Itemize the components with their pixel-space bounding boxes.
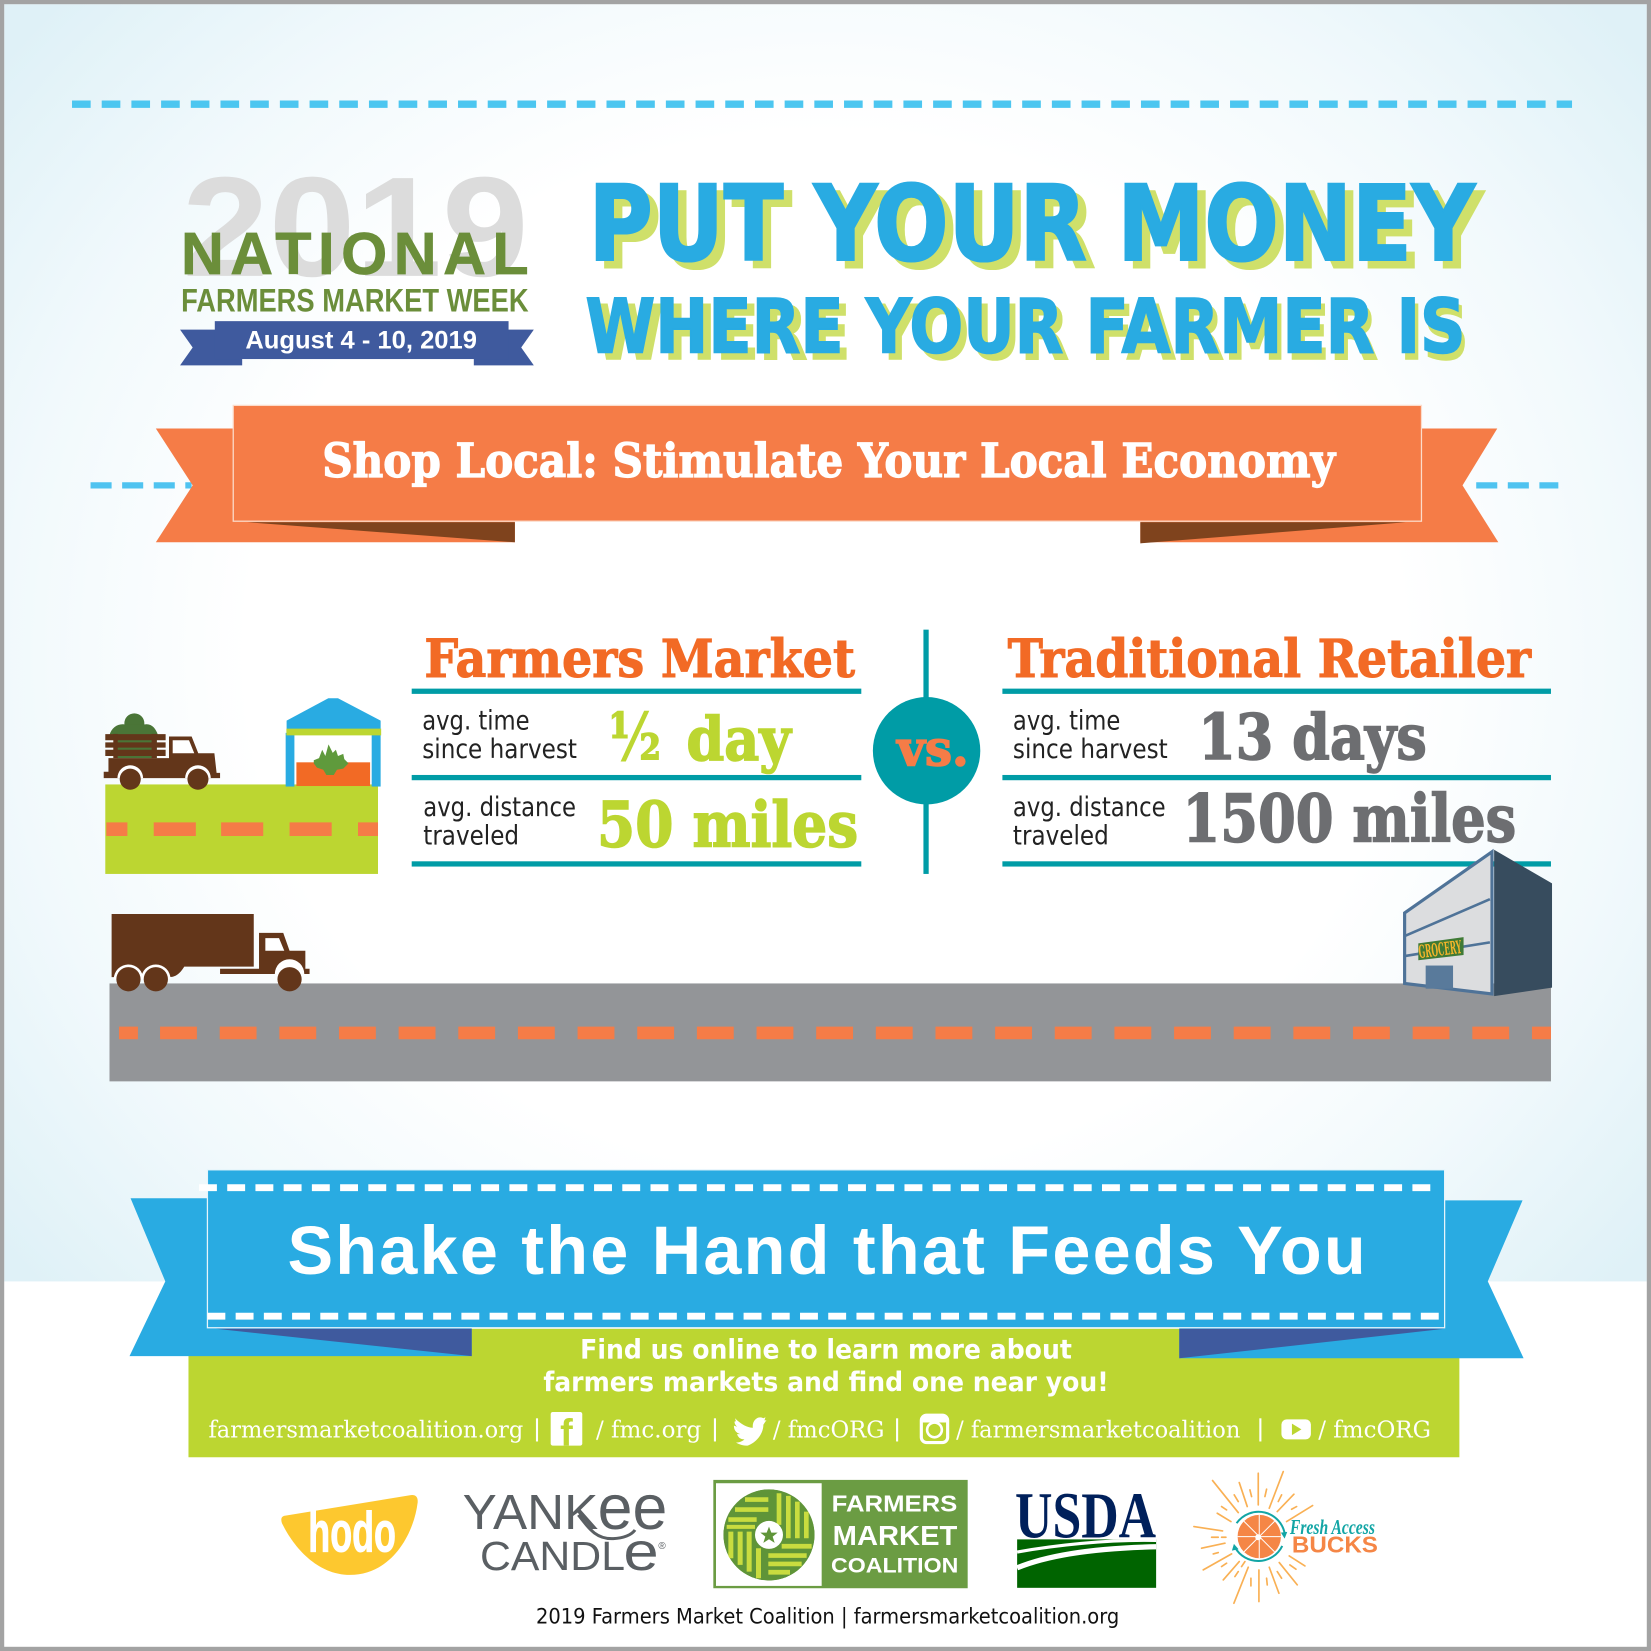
logo: yankee candle [463,1473,667,1582]
footer credit: 2019 Farmers Market Coalition | farmersmarketcoalition.org [536,1604,1119,1630]
icon: facebook [551,1412,582,1455]
logo: yankee candle: ® [658,1541,666,1552]
scene: farm truck and market stall on short road [104,698,381,874]
heading: Traditional Retailer [1008,629,1532,690]
versus badge [873,630,980,874]
message: Find us online to learn more about [580,1335,1072,1365]
facebook handle: / fmc.org [596,1417,701,1443]
icon: grocery store: GROCERY [1417,937,1463,963]
title: WHERE YOUR FARMER IS [594,290,1469,377]
title: WHERE YOUR FARMER IS [585,284,1466,371]
value: half day: ½ [609,700,661,776]
label: time: avg. time [1013,707,1120,737]
badge: 2019 National Farmers Market Week [180,148,534,365]
banner: shop local: Shop Local: Stimulate Your Local Economy [322,434,1337,488]
instagram handle: / farmersmarketcoalition [956,1417,1240,1443]
versus badge: vs. [896,721,969,777]
value: 1500 miles: 1500 miles [1182,781,1516,857]
year: 2019 [182,148,529,307]
label: time: since harvest [1013,735,1168,765]
icon: twitter [734,1417,767,1446]
label: time: since harvest [422,735,577,765]
heading: Farmers Market [424,629,856,690]
date ribbon: August 4 - 10, 2019 [245,327,477,355]
title: PUT YOUR MONEY [597,170,1485,292]
label: time: avg. time [422,707,530,737]
banner: shake the hand [130,1170,1524,1358]
logo: fresh access bucks: BUCKS [1292,1532,1378,1558]
long grey road [110,983,1551,1081]
logo: yankee candle: ee [598,1473,667,1543]
logo: farmers market coalition: FARMERS [832,1491,957,1517]
banner: shake the hand: Shake the Hand that Feeds You [287,1212,1366,1289]
value: 13 days: 13 days [1198,700,1427,774]
icon: market stall [286,698,381,787]
label: distance: avg. distance [423,793,576,823]
date ribbon [180,321,534,365]
icon: farm truck [104,713,220,790]
logo: yankee candle: e [623,1523,659,1582]
banner: shop local [156,405,1498,543]
message: farmers markets and find one near you! [543,1368,1109,1398]
value: 50 miles: 50 miles [597,788,858,862]
logo: hodo: hodo [308,1502,396,1565]
logo: farmers market coalition: COALITION [831,1554,958,1578]
value: half day [609,700,793,776]
logo: hodo [281,1495,418,1575]
logo: farmers market coalition [713,1480,968,1588]
label: distance: traveled [1013,821,1109,851]
logo: fresh access bucks [1194,1472,1378,1603]
icon: grocery store [1405,850,1552,996]
youtube handle: / fmcORG [1318,1417,1431,1443]
icon: facebook: f [560,1413,573,1455]
title: PUT YOUR MONEY [589,163,1476,285]
farmers market week: FARMERS MARKET WEEK [181,282,529,319]
logo: usda: USDA [1015,1480,1156,1552]
short green road [105,784,378,874]
panel: online links [188,1329,1459,1457]
icon: youtube [1281,1419,1311,1439]
national: NATIONAL [181,222,529,287]
panel: farmers market [412,629,861,867]
icon: delivery truck [112,914,310,991]
logo: yankee candle: CANDL [480,1533,625,1579]
icon: instagram [921,1415,948,1443]
title [585,163,1485,377]
logo: yankee candle: YANK [463,1485,598,1540]
logo: fresh access bucks: Fresh Access [1289,1517,1375,1539]
website link: farmersmarketcoalition.org [208,1417,523,1443]
panel: traditional retailer [1002,629,1551,867]
label: distance: avg. distance [1013,793,1166,823]
twitter handle: / fmcORG [773,1417,884,1443]
label: distance: traveled [423,821,519,851]
logo: usda [1015,1480,1156,1588]
logo: farmers market coalition: MARKET [833,1520,958,1551]
value: half day: day [687,705,793,775]
